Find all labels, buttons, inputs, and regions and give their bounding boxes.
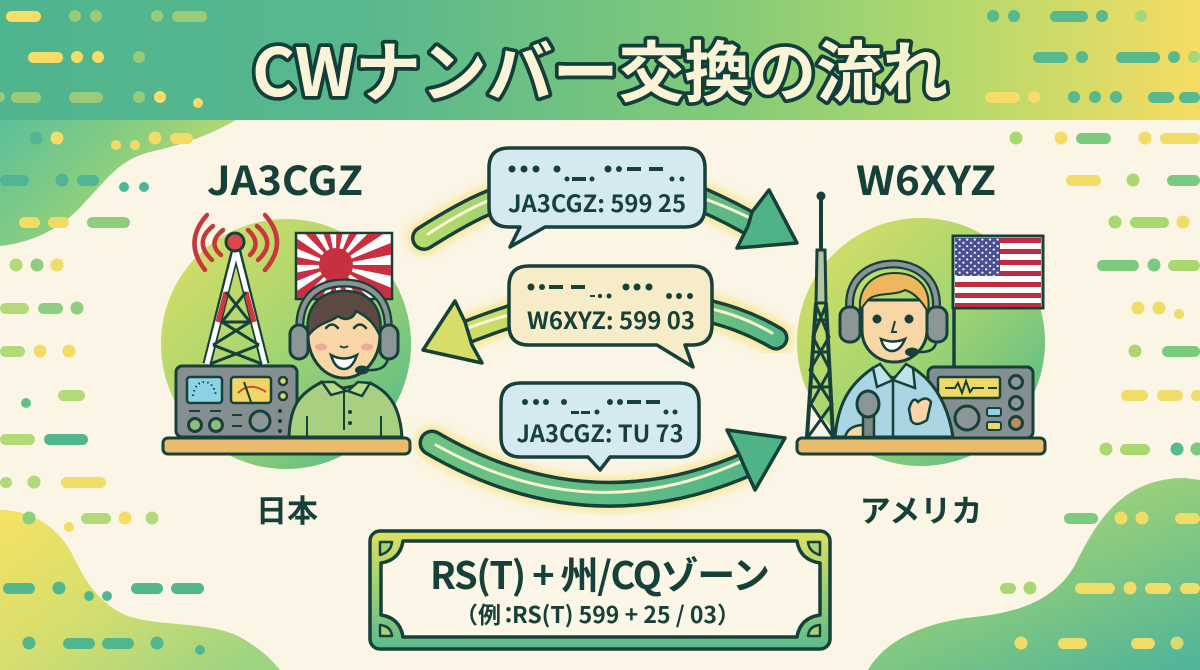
morse pattern: right side — [1000, 132, 1200, 650]
desk — [163, 438, 410, 454]
speech bubble: TU 73 — [501, 383, 699, 470]
frame corners — [380, 542, 820, 636]
backdrop circle — [797, 218, 1045, 466]
arrow: JA3CGZ to W6XYZ — [424, 182, 797, 248]
person: Japanese operator — [289, 283, 402, 437]
person: American operator — [835, 264, 953, 437]
corner blob: bottom right — [868, 478, 1200, 670]
example text: （例：RS(T) 599 + 25 / 03） — [455, 596, 740, 630]
icon: antenna tower — [207, 233, 265, 364]
icon: rising sun flag — [294, 232, 394, 300]
message text: JA3CGZ: TU 73 — [516, 415, 684, 449]
morse pattern: left side — [0, 132, 205, 655]
icon: transceiver — [176, 366, 297, 437]
exchange format box — [370, 531, 830, 649]
station: JA3CGZ Japan — [161, 149, 411, 531]
arrow: W6XYZ to JA3CGZ — [423, 301, 776, 363]
corner blob: top left — [0, 120, 236, 246]
backdrop circle — [161, 219, 411, 469]
icon: US flag — [953, 236, 1043, 368]
icon: lattice tower — [807, 192, 833, 437]
morse code — [528, 284, 693, 299]
morse code — [508, 166, 684, 182]
icon: radio waves — [194, 215, 277, 270]
morse code — [522, 399, 678, 414]
format text: RS(T) + 州/CQゾーン — [430, 545, 770, 600]
desk — [797, 438, 1045, 454]
station: W6XYZ USA — [797, 149, 1045, 531]
frame — [370, 531, 830, 649]
message text: JA3CGZ: 599 25 — [508, 185, 686, 219]
callsign: JA3CGZ: JA3CGZ — [207, 149, 363, 207]
speech bubble: JA3CGZ report — [489, 148, 705, 247]
country label: Japan: 日本 — [256, 486, 318, 531]
header morse: left — [0, 10, 207, 108]
title: CWナンバー交換の流れ — [252, 20, 948, 116]
header band — [0, 0, 1200, 120]
icon: transceiver — [928, 367, 1033, 438]
corner blob: bottom left — [0, 510, 280, 670]
arrow: JA3CGZ TU 73 — [432, 430, 785, 494]
country label: America: アメリカ — [860, 486, 982, 531]
speech bubble: W6XYZ report — [509, 266, 712, 367]
header morse: right — [985, 10, 1200, 103]
message text: W6XYZ: 599 03 — [527, 302, 695, 336]
callsign: W6XYZ: W6XYZ — [856, 149, 996, 207]
